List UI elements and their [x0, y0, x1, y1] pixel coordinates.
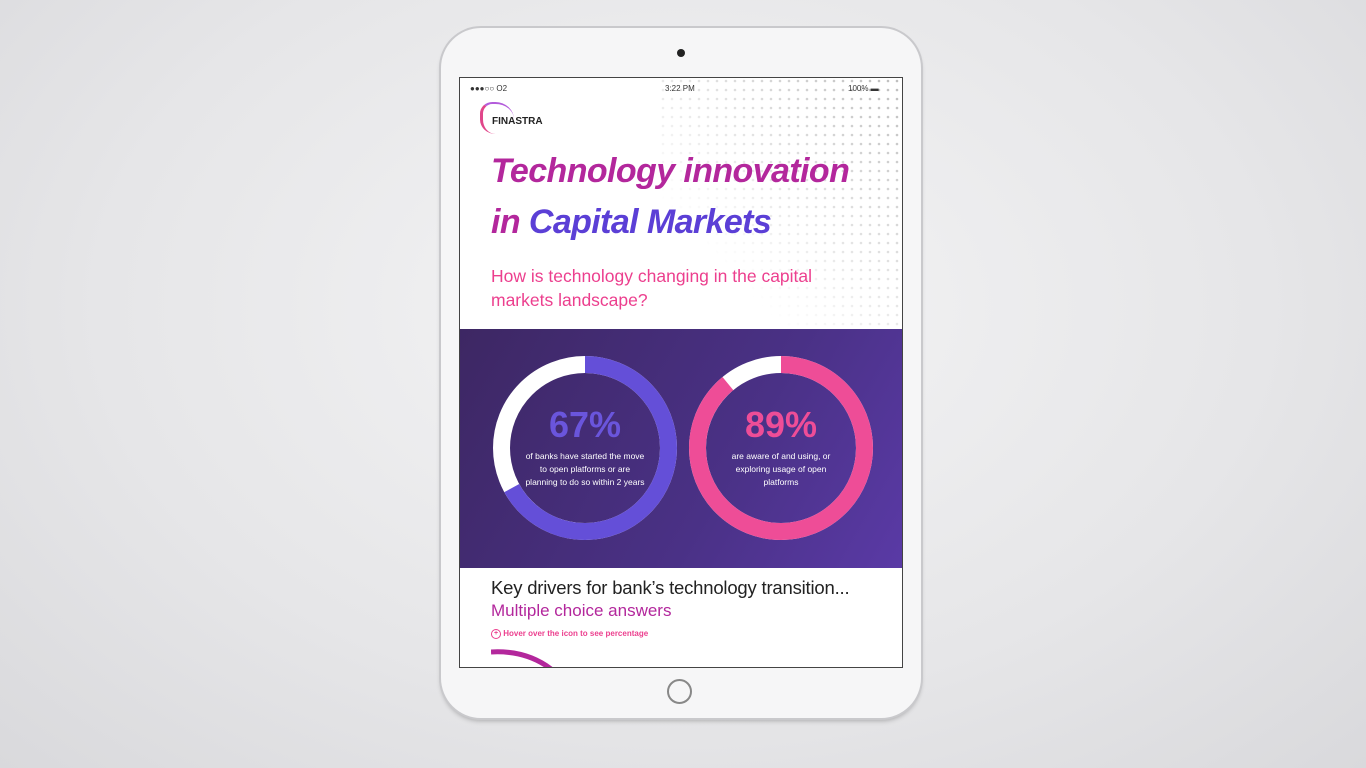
screen	[459, 77, 903, 668]
dot pattern	[662, 80, 898, 326]
title: in Capital Markets	[491, 203, 771, 241]
status bar	[470, 84, 879, 93]
home button	[667, 679, 692, 704]
stat text: 89%: are aware of and using, or exploring usage of open platforms	[732, 451, 830, 487]
hint with icon: Hover over the icon to see percentage	[503, 629, 648, 638]
stat text: 67%: of banks have started the move to open platforms or are planning to do so within 2 years	[525, 451, 645, 487]
logo	[480, 102, 543, 134]
section subheading: Multiple choice answers	[491, 601, 671, 620]
subtitle: How is technology changing in the capital markets landscape?	[491, 266, 812, 310]
hint with icon: +	[494, 630, 498, 637]
stat text: 89%	[732, 404, 830, 487]
stat text: 67%	[525, 404, 645, 487]
logo: FINASTRA	[492, 116, 543, 127]
camera	[677, 49, 685, 57]
tablet body	[441, 28, 921, 718]
title: Technology innovation	[491, 152, 849, 190]
donut chart: 89%	[689, 356, 873, 540]
title	[491, 152, 849, 241]
donut chart: 67%	[493, 356, 677, 540]
panel: stats band	[460, 329, 904, 568]
section heading: Key drivers for bank’s technology transition...	[491, 577, 849, 598]
stat text: 89%: 89%	[745, 404, 817, 445]
stat text: 67%: 67%	[549, 404, 621, 445]
status bar: 3:22 PM	[665, 84, 695, 93]
arc decoration	[491, 649, 552, 667]
status bar: 100% ▬	[848, 84, 879, 93]
status bar: ●●●○○ O2	[470, 84, 507, 93]
